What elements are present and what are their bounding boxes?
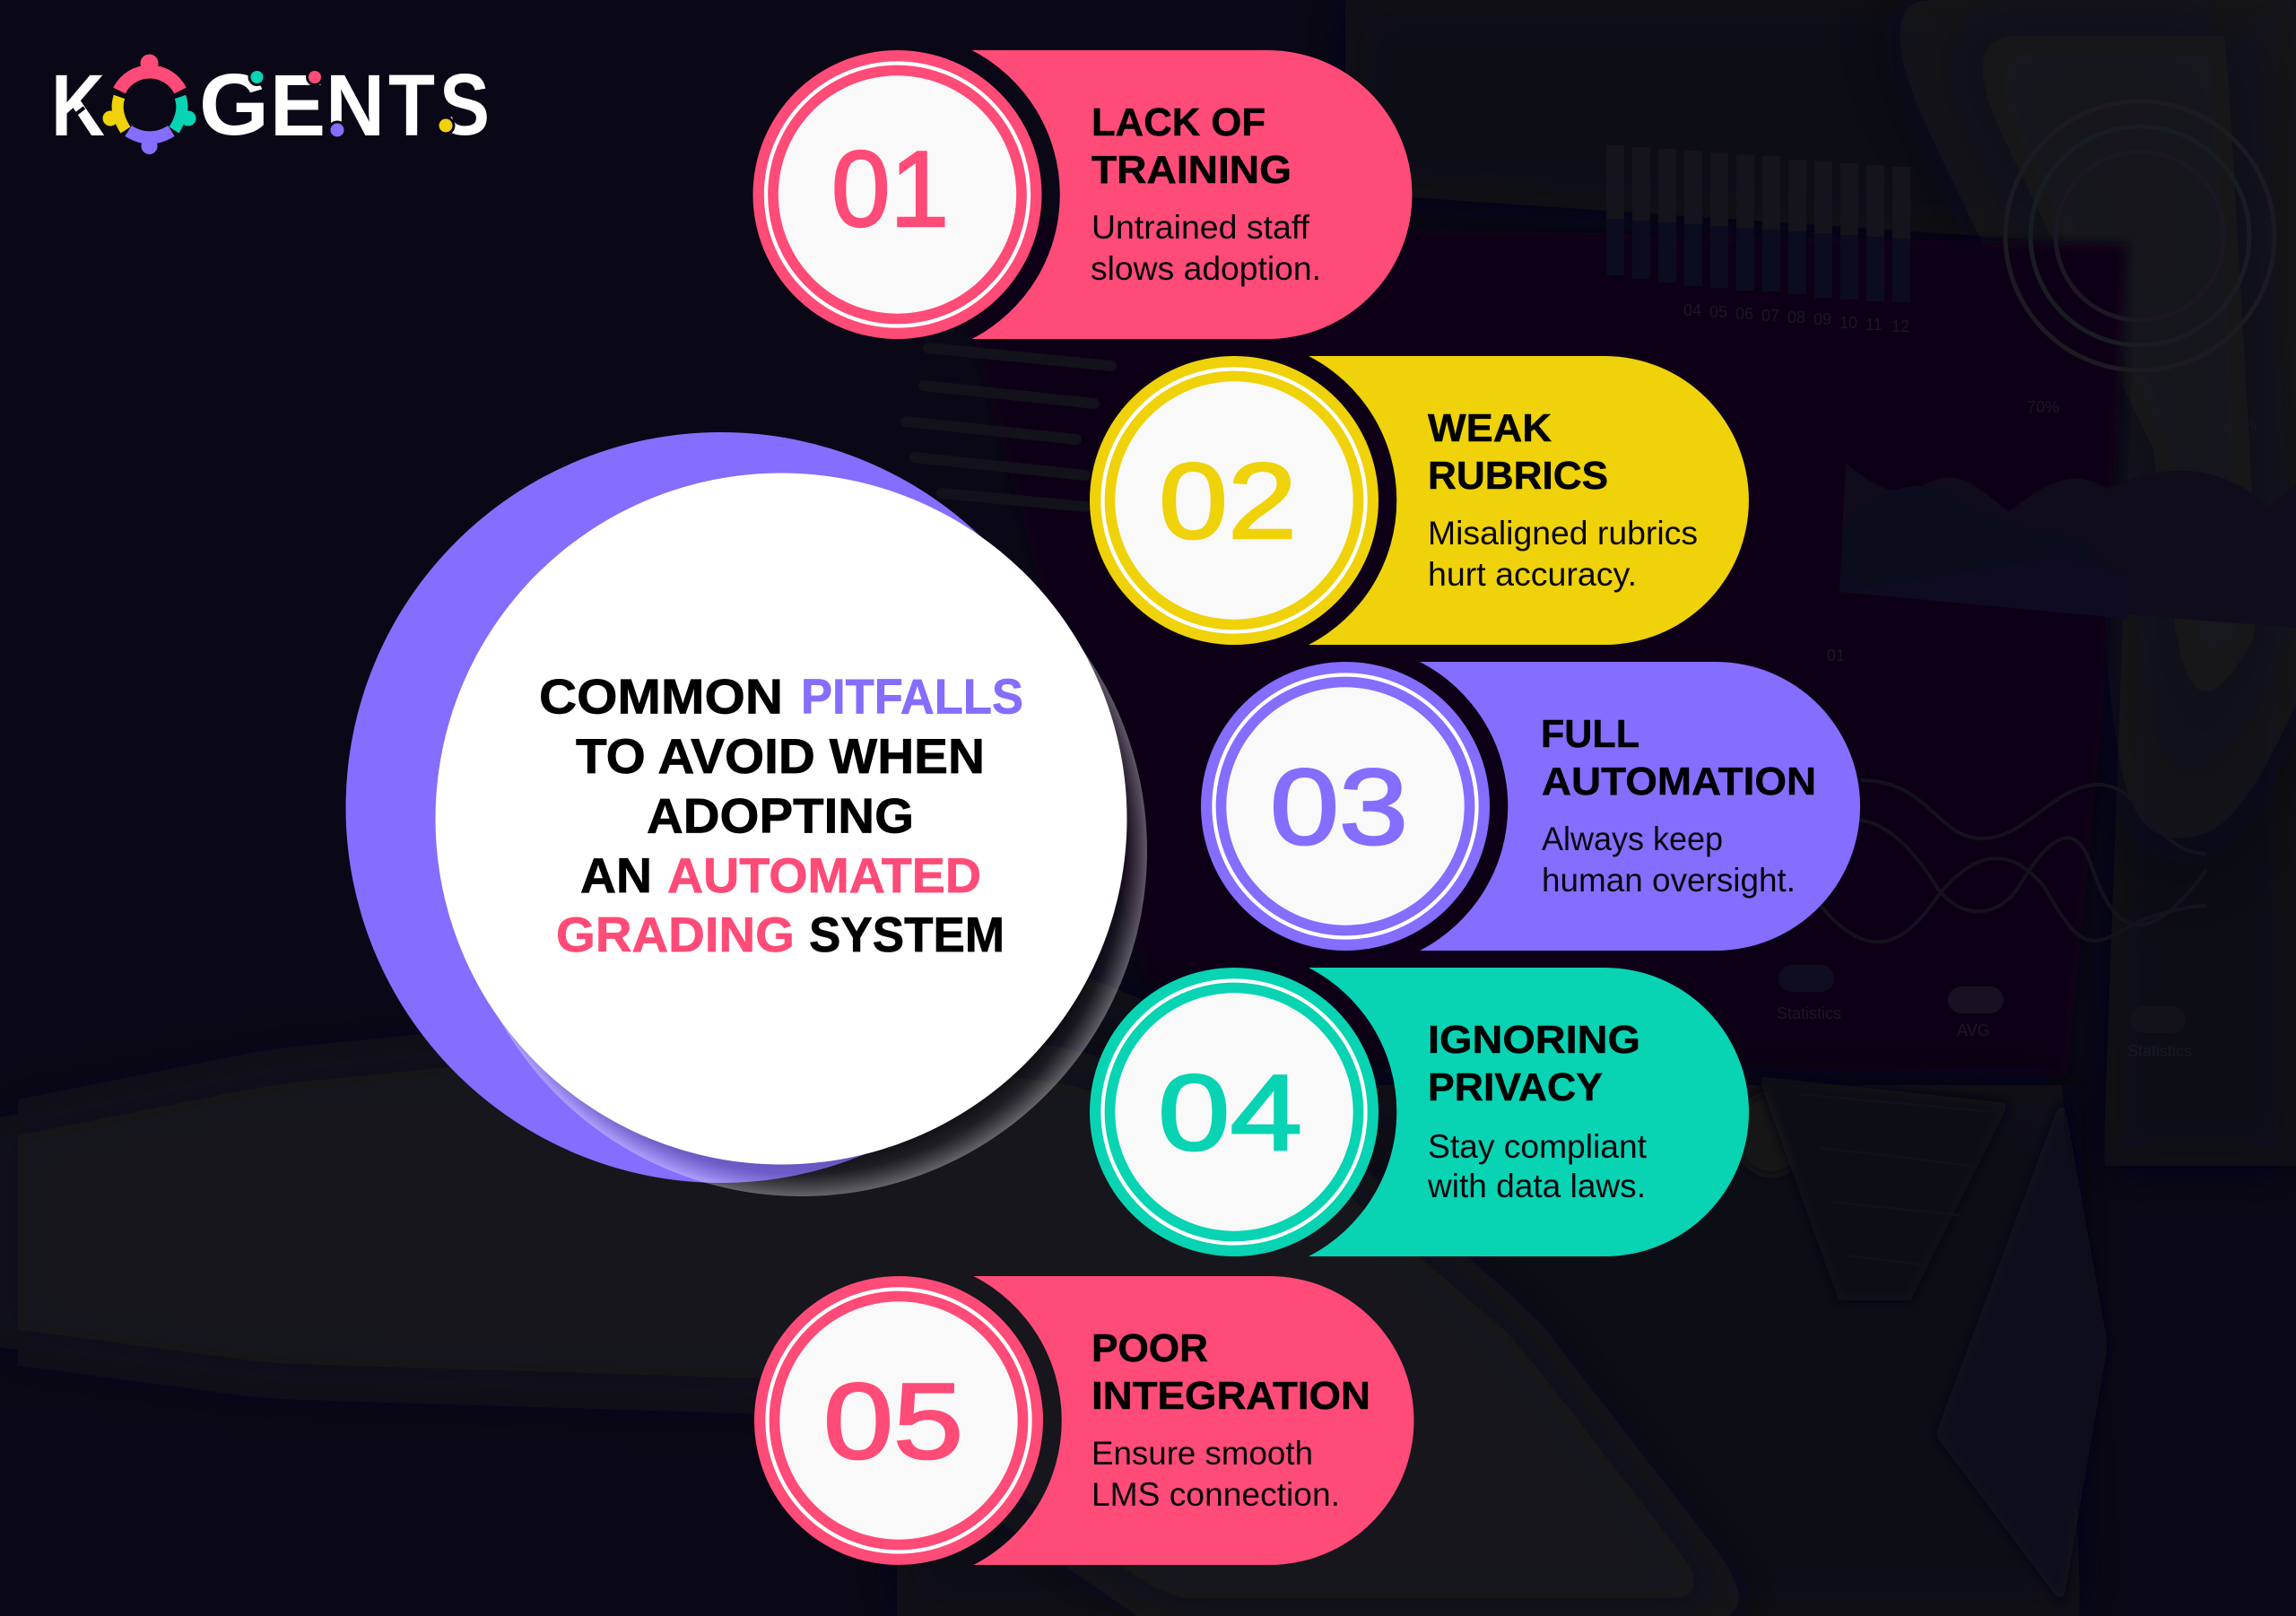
heading: AUTOMATED <box>667 847 981 903</box>
text: LMS connection. <box>1091 1476 1340 1513</box>
background photo: laptop and hands: 12 <box>1892 317 1909 335</box>
background photo: laptop and hands: Statistics <box>2127 1042 2192 1060</box>
purple crescent <box>346 432 1096 1183</box>
logo letters: T <box>388 56 435 154</box>
heading: ADOPTING <box>647 787 914 843</box>
text <box>1428 406 1698 593</box>
pill <box>972 50 1412 339</box>
background photo: laptop and hands: 70% <box>2027 398 2059 416</box>
background photo: laptop and hands: Statistics <box>1777 1004 1841 1022</box>
number badge <box>1090 356 1378 645</box>
text: hurt accuracy. <box>1428 556 1637 593</box>
text: Stay compliant <box>1428 1128 1648 1165</box>
logo letters: N <box>326 56 385 154</box>
text: Ensure smooth <box>1091 1435 1313 1472</box>
number badge <box>1201 662 1490 951</box>
background photo: laptop and hands: 06 <box>1735 305 1753 323</box>
white disk <box>436 474 1126 1164</box>
text <box>1427 1018 1648 1204</box>
text: with data laws. <box>1427 1168 1646 1204</box>
background photo: laptop and hands: 85% <box>2224 416 2257 434</box>
background photo: laptop and hands: AVG <box>1957 1021 1990 1039</box>
number badge <box>754 1276 1043 1565</box>
background photo: laptop and hands: 07 <box>1761 307 1779 325</box>
text: IGNORING <box>1428 1018 1640 1062</box>
central circle panel <box>346 432 1147 1196</box>
heading <box>539 669 1023 962</box>
panel: 04 ignoring privacy <box>1090 968 1749 1256</box>
background photo: laptop and hands: 10 <box>1839 314 1857 332</box>
text: TRAINING <box>1091 148 1292 192</box>
number badge: 02 <box>1159 441 1297 561</box>
text: FULL <box>1541 712 1639 756</box>
logo letters: E <box>270 56 326 154</box>
icon: circle of people <box>102 54 196 154</box>
text: Always keep <box>1542 821 1723 857</box>
panel: 03 full automation <box>1201 662 1860 951</box>
logo letters: G <box>199 56 269 153</box>
logo letters: S <box>439 56 490 153</box>
panel: 02 weak rubrics <box>1090 356 1749 645</box>
background photo: laptop and hands: 01 <box>1827 647 1845 665</box>
heading: GRADING <box>556 907 795 962</box>
logo: KOGENTS <box>51 54 490 154</box>
panel: 05 poor integration <box>754 1276 1413 1565</box>
number badge <box>753 50 1042 339</box>
panel: 01 lack of training <box>753 50 1412 339</box>
text: Misaligned rubrics <box>1428 515 1698 552</box>
text: INTEGRATION <box>1091 1374 1370 1418</box>
pill <box>1420 662 1860 951</box>
logo letters <box>51 56 490 154</box>
text: PRIVACY <box>1428 1065 1603 1109</box>
text: RUBRICS <box>1428 454 1608 498</box>
number badge: 01 <box>831 129 949 249</box>
text: WEAK <box>1428 406 1552 450</box>
text: human oversight. <box>1542 862 1796 899</box>
text <box>1091 100 1321 287</box>
curled shadow disk <box>456 505 1147 1196</box>
pill <box>1309 356 1749 645</box>
text: LACK OF <box>1091 100 1265 144</box>
logo letters: K <box>51 56 105 154</box>
background photo: laptop and hands: 11 <box>1866 316 1883 334</box>
number badge: 04 <box>1158 1053 1302 1173</box>
background photo: laptop and hands: 09 <box>1813 310 1831 328</box>
text: POOR <box>1091 1326 1208 1370</box>
background photo: laptop and hands: 05 <box>1709 303 1727 321</box>
heading: COMMON <box>539 669 783 725</box>
heading: AN <box>580 847 652 903</box>
text: slows adoption. <box>1091 250 1321 287</box>
text: AUTOMATION <box>1542 760 1816 804</box>
heading: TO AVOID WHEN <box>576 728 985 784</box>
number badge: 03 <box>1270 747 1408 867</box>
background photo: laptop and hands: 08 <box>1787 308 1805 326</box>
text <box>1091 1326 1370 1513</box>
text: Untrained staff <box>1091 209 1310 246</box>
text <box>1541 712 1816 899</box>
pill <box>1309 968 1749 1256</box>
background photo: laptop and hands: 04 <box>1683 301 1701 319</box>
pill <box>974 1276 1413 1565</box>
logo dots <box>251 71 452 136</box>
heading: PITFALLS <box>801 669 1023 725</box>
heading: SYSTEM <box>809 907 1004 962</box>
number badge <box>1090 968 1378 1256</box>
number badge: 05 <box>823 1361 963 1481</box>
